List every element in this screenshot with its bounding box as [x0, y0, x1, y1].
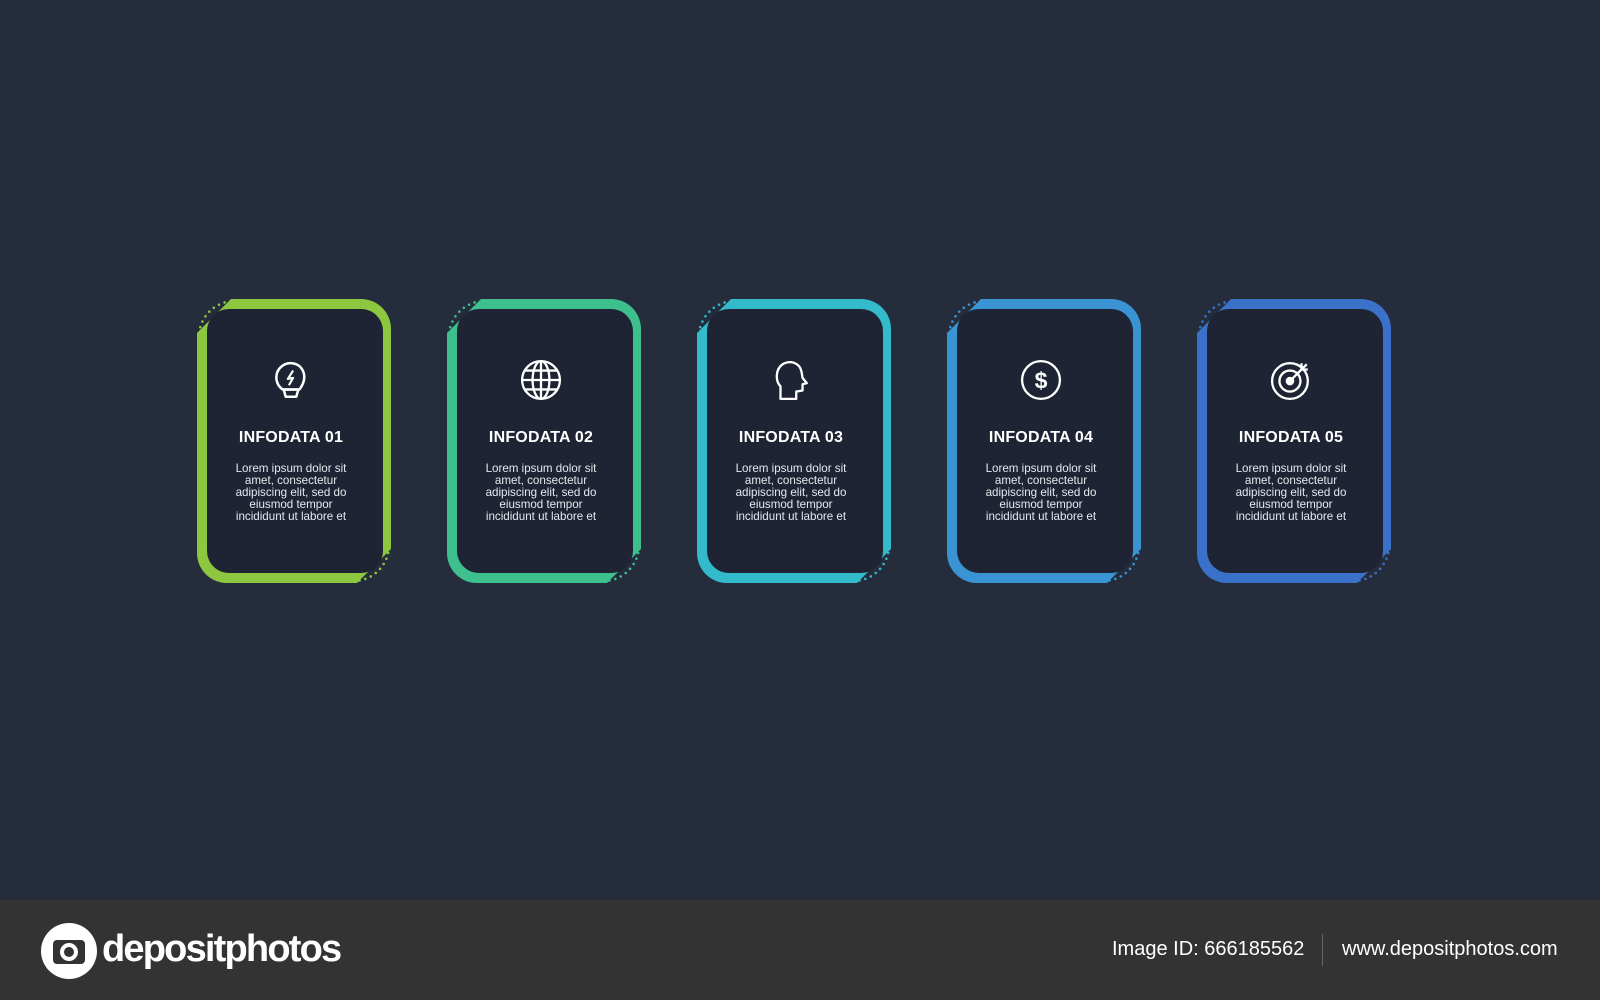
- text 03: adipiscing elit, sed do: [736, 486, 846, 499]
- text 02: eiusmod tempor: [499, 498, 583, 511]
- title 01: INFODATA 01: [239, 429, 343, 446]
- footer logo: depositphotos: [102, 928, 340, 970]
- text 05: incididunt ut labore et: [1236, 510, 1346, 523]
- footer url: www.depositphotos.com: [1342, 938, 1558, 960]
- text 03: [736, 462, 846, 523]
- text 05: Lorem ipsum dolor sit: [1236, 462, 1346, 475]
- footer image id: Image ID: 666185562: [1112, 938, 1304, 960]
- card 1: [197, 299, 391, 583]
- text 01: amet, consectetur: [245, 474, 337, 487]
- icon: globe: [520, 360, 562, 400]
- text 02: Lorem ipsum dolor sit: [486, 462, 596, 475]
- text 04: amet, consectetur: [995, 474, 1087, 487]
- title 05: INFODATA 05: [1239, 429, 1343, 446]
- text 02: adipiscing elit, sed do: [486, 486, 596, 499]
- icon: dollar coin: $: [1035, 367, 1048, 393]
- icon: dollar coin: [1020, 360, 1062, 400]
- text 02: amet, consectetur: [495, 474, 587, 487]
- text 05: [1236, 462, 1346, 523]
- text 01: adipiscing elit, sed do: [236, 486, 346, 499]
- icon: head: [776, 361, 808, 400]
- text 04: incididunt ut labore et: [986, 510, 1096, 523]
- text 01: [236, 462, 346, 523]
- text 04: Lorem ipsum dolor sit: [986, 462, 1096, 475]
- text 02: incididunt ut labore et: [486, 510, 596, 523]
- card 2: [447, 299, 641, 583]
- text 05: adipiscing elit, sed do: [1236, 486, 1346, 499]
- title 03: INFODATA 03: [739, 429, 843, 446]
- title 04: INFODATA 04: [989, 429, 1093, 446]
- card 5: [1197, 299, 1391, 583]
- text 03: incididunt ut labore et: [736, 510, 846, 523]
- text 03: eiusmod tempor: [749, 498, 833, 511]
- footer bar: [0, 900, 1600, 1000]
- text 02: [486, 462, 596, 523]
- text 01: eiusmod tempor: [249, 498, 333, 511]
- text 01: incididunt ut labore et: [236, 510, 346, 523]
- title 02: INFODATA 02: [489, 429, 593, 446]
- text 04: eiusmod tempor: [999, 498, 1083, 511]
- footer logo: [41, 923, 341, 979]
- text 03: Lorem ipsum dolor sit: [736, 462, 846, 475]
- card 3: [697, 299, 891, 583]
- icon: light bulb: [275, 362, 306, 398]
- text 05: amet, consectetur: [1245, 474, 1337, 487]
- icon: target: [1270, 362, 1309, 400]
- text 04: [986, 462, 1096, 523]
- text 05: eiusmod tempor: [1249, 498, 1333, 511]
- card 4: [947, 299, 1141, 583]
- text 04: adipiscing elit, sed do: [986, 486, 1096, 499]
- text 01: Lorem ipsum dolor sit: [236, 462, 346, 475]
- text 03: amet, consectetur: [745, 474, 837, 487]
